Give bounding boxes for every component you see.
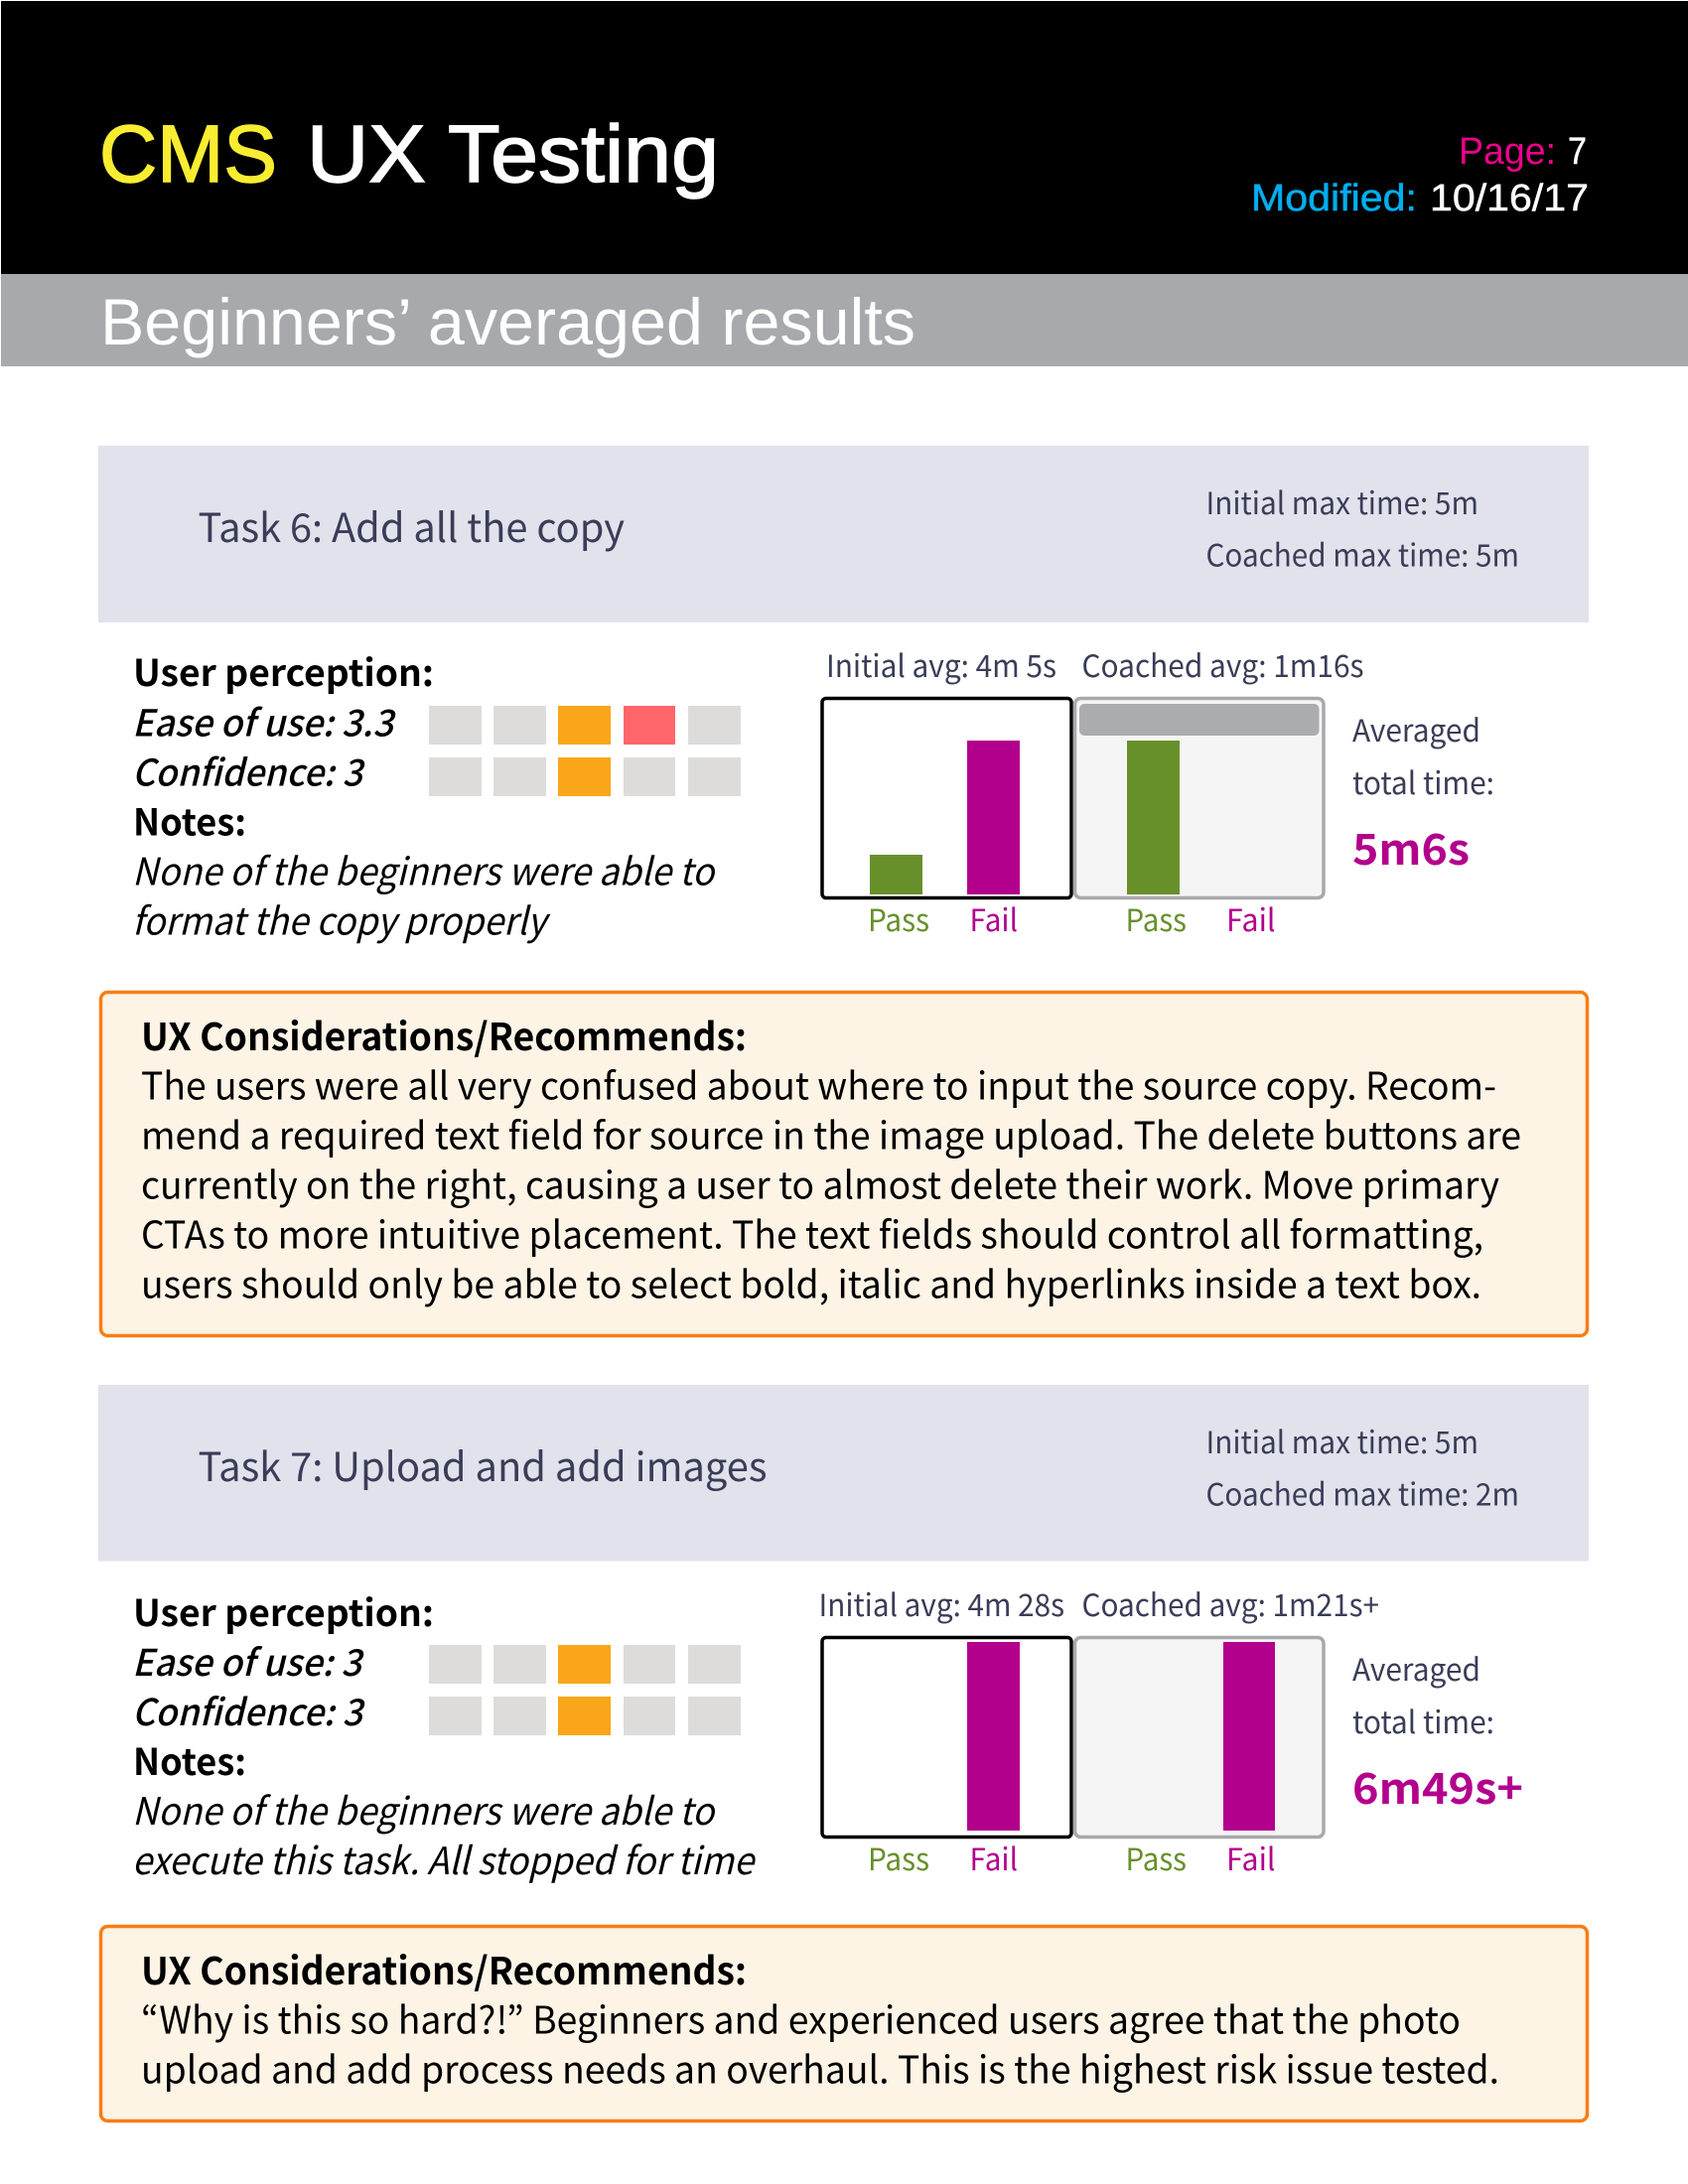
task 6 max times: Coached max time: 5m [1205,530,1519,576]
task 6 max times: Initial max time: 5m [1205,478,1478,523]
callout body: mend a required text field for source in the image upload. The delete buttons are [141,1106,1521,1160]
heading: User perception: [133,643,434,697]
title: CMS [99,109,277,200]
ease of use rating squares [429,1645,741,1684]
ease of use rating squares [429,706,741,745]
initial bar chart [822,699,1071,940]
confidence score: Confidence: 3 [132,743,366,796]
coached average label: Coached avg: 1m16s [1082,641,1364,686]
averaged total time: total time: [1352,758,1494,803]
averaged total time: total time: [1352,1698,1494,1742]
notes text: format the copy properly [132,891,551,945]
task 7 max times [1205,1418,1519,1515]
modified date [1251,178,1589,219]
ease of use score: Ease of use: 3 [132,1633,365,1687]
notes text: None of the beginners were able to [132,1781,717,1836]
callout body: users should only be able to select bold, italic and hyperlinks inside a text box. [141,1255,1481,1308]
task 7 max times: Initial max time: 5m [1205,1418,1478,1462]
callout heading: UX Considerations/Recommends: [141,1941,747,1995]
notes heading: Notes: [133,792,246,846]
notes heading: Notes: [133,1732,246,1786]
initial bar chart: Fail [969,895,1018,940]
notes text: execute this task. All stopped for time [132,1831,757,1885]
header band [1,1,1688,274]
initial bar chart: Fail [969,1835,1018,1879]
initial average label: Initial avg: 4m 5s [826,641,1056,686]
page number: 7 [1568,131,1587,173]
panel: task 7 time charts [818,1580,1523,1879]
task 7 title: Task 7: Upload and add images [199,1435,767,1493]
averaged total time [1352,1645,1523,1817]
modified date: Modified: [1251,178,1417,219]
callout body: currently on the right, causing a user to almost delete their work. Move primary [141,1156,1499,1209]
notes text [132,842,717,945]
page number: Page: [1459,131,1556,173]
callout body: “Why is this so hard?!” Beginners and experienced users agree that the photo [141,1989,1461,2045]
callout: task 7 recommendations [101,1926,1587,2120]
notes text [132,1781,757,1885]
coached bar chart: Pass [1126,1835,1187,1879]
subtitle: Beginners’ averaged results [100,285,915,358]
initial average label: Initial avg: 4m 28s [818,1580,1064,1625]
callout body: The users were all very confused about where to input the source copy. Recom- [141,1056,1496,1110]
confidence rating squares [429,757,741,796]
coached bar chart [1074,699,1324,940]
callout body: CTAs to more intuitive placement. The text fields should control all formatting, [141,1205,1483,1259]
callout body [141,1056,1521,1308]
callout heading: UX Considerations/Recommends: [141,1007,747,1061]
modified date: 10/16/17 [1430,178,1589,219]
averaged total time [1352,706,1494,878]
callout body [141,1989,1499,2095]
panel: task 6 header [98,446,1589,622]
task 6 title: Task 6: Add all the copy [199,496,625,554]
callout body: upload and add process needs an overhaul. This is the highest risk issue tested. [141,2039,1499,2095]
initial bar chart: Pass [868,895,929,940]
subtitle band [1,274,1688,366]
coached bar chart: Fail [1226,1835,1275,1879]
task 7 max times: Coached max time: 2m [1205,1469,1519,1515]
panel: task 6 time charts [822,641,1494,940]
panel: task 6 user perception [132,643,741,945]
title remainder: UX Testing [307,109,719,200]
initial bar chart: Pass [868,1835,929,1879]
coached average label: Coached avg: 1m21s+ [1082,1580,1379,1625]
notes text: None of the beginners were able to [132,842,717,895]
confidence score: Confidence: 3 [132,1683,366,1736]
callout: task 6 recommendations [101,993,1587,1336]
initial bar chart [822,1638,1071,1879]
task 6 max times [1205,478,1519,576]
averaged total time: 5m6s [1352,816,1470,878]
coached bar chart [1074,1638,1324,1879]
averaged total time: 6m49s+ [1352,1755,1523,1817]
averaged total time: Averaged [1352,1645,1480,1690]
coached bar chart: Pass [1126,895,1187,940]
panel: task 7 header [98,1385,1589,1561]
panel: task 7 user perception [132,1583,757,1885]
ease of use score: Ease of use: 3.3 [132,693,397,747]
confidence rating squares [429,1697,741,1735]
coached bar chart: Fail [1226,895,1275,940]
heading: User perception: [133,1583,434,1637]
averaged total time: Averaged [1352,706,1480,751]
